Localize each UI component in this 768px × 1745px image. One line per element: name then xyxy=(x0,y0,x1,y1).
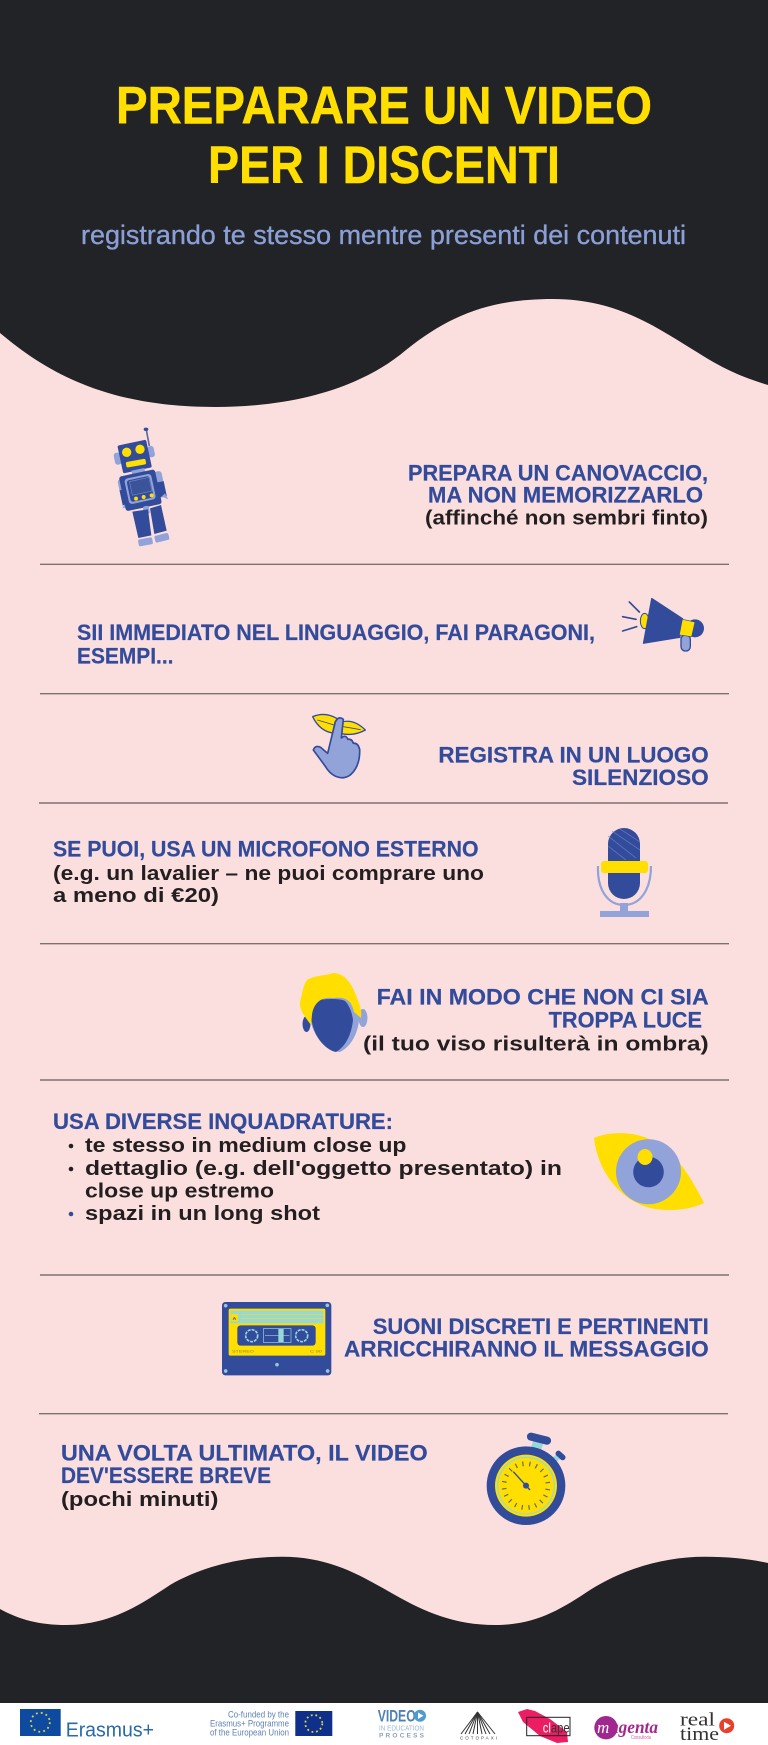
logo: Magenta: Consultoria xyxy=(631,1735,651,1741)
logo: Realtime: time xyxy=(680,1724,719,1745)
panel: logo strip xyxy=(0,1703,768,1745)
text: prepare a script: PREPARA UN CANOVACCIO, xyxy=(408,461,708,486)
text: avoid too much backlight: (il tuo viso risulterà in ombra) xyxy=(363,1033,709,1056)
icon: stopwatch xyxy=(487,1432,567,1525)
logo: Magenta xyxy=(594,1716,658,1741)
icon: eye xyxy=(594,1133,704,1210)
icon: head in shadow xyxy=(300,973,368,1052)
text: avoid too much backlight: FAI IN MODO CHE NON CI SIA xyxy=(377,985,709,1010)
title: PER I DISCENTI xyxy=(208,136,560,195)
title xyxy=(116,76,652,195)
text: record in a quiet place: SILENZIOSO xyxy=(572,765,709,790)
icon: cassette tape: A xyxy=(233,1316,237,1322)
panel: dark header with wave xyxy=(0,0,768,407)
icon: robot xyxy=(113,428,170,546)
text: use different shots: dettaglio (e.g. dell'oggetto presentato) in xyxy=(85,1157,562,1180)
logo: Cotopaxi: COTOPAXI xyxy=(460,1736,497,1740)
panel: dark footer wave xyxy=(0,1557,768,1704)
subtitle: registrando te stesso mentre presenti dei contenuti xyxy=(81,220,686,250)
logo: co-funded by the EU: of the European Union xyxy=(210,1728,289,1738)
text: use different shots: close up estremo xyxy=(85,1179,274,1202)
text: keep the video short: (pochi minuti) xyxy=(61,1488,218,1511)
text: use different shots xyxy=(53,1109,562,1225)
logo: Video in Education Process: VIDEO xyxy=(378,1707,416,1726)
text: prepare a script xyxy=(408,461,708,529)
text: avoid too much backlight xyxy=(363,985,709,1056)
text: use different shots: USA DIVERSE INQUADRATURE: xyxy=(53,1109,393,1134)
text: record in a quiet place: REGISTRA IN UN LUOGO xyxy=(438,742,709,767)
logo: co-funded by the EU: Co-funded by the xyxy=(228,1709,289,1719)
logo: Magenta: m xyxy=(597,1718,609,1737)
text: prepare a script: MA NON MEMORIZZARLO xyxy=(428,483,703,508)
text: keep the video short: DEV'ESSERE BREVE xyxy=(61,1463,271,1488)
text: immediate language: ESEMPI... xyxy=(77,643,174,668)
icon: hush finger over lips xyxy=(313,714,365,778)
text: external microphone: (e.g. un lavalier – ne puoi comprare uno xyxy=(53,862,484,885)
text: external microphone: SE PUOI, USA UN MICROFONO ESTERNO xyxy=(53,837,478,862)
logo: Clape: clape xyxy=(543,1720,570,1736)
logo: Realtime: real xyxy=(680,1710,715,1731)
text: external microphone: a meno di €20) xyxy=(53,884,219,907)
logo: Video in Education Process: PROCESS xyxy=(379,1733,425,1740)
icon: cassette tape xyxy=(222,1302,331,1375)
text: keep the video short xyxy=(61,1441,428,1511)
text: use different shots: spazi in un long shot xyxy=(85,1202,320,1225)
logo: co-funded by the EU: Erasmus+ Programme xyxy=(210,1718,289,1728)
logo: Video in Education Process: IN EDUCATION xyxy=(379,1726,424,1733)
icon: microphone xyxy=(598,828,651,917)
text: immediate language xyxy=(77,620,595,668)
text: external microphone xyxy=(53,837,484,907)
text: record in a quiet place xyxy=(438,742,709,790)
title: PREPARARE UN VIDEO xyxy=(116,76,652,135)
logo: Magenta: agenta xyxy=(610,1717,658,1737)
logo: Realtime xyxy=(680,1710,734,1745)
text: prepare a script: (affinché non sembri finto) xyxy=(425,506,708,529)
logo: Erasmus+ xyxy=(20,1709,154,1742)
text: discreet sounds: SUONI DISCRETI E PERTINENTI xyxy=(373,1314,709,1339)
logo: Clape xyxy=(518,1709,570,1743)
text: discreet sounds: ARRICCHIRANNO IL MESSAGGIO xyxy=(344,1337,709,1362)
text: use different shots: te stesso in medium close up xyxy=(85,1134,406,1157)
text: avoid too much backlight: TROPPA LUCE xyxy=(549,1008,702,1033)
text: keep the video short: UNA VOLTA ULTIMATO, IL VIDEO xyxy=(61,1441,428,1466)
logo: co-funded by the EU xyxy=(210,1709,332,1738)
logo: Video in Education Process xyxy=(378,1707,426,1740)
icon: cassette tape: STEREO xyxy=(232,1349,254,1354)
logo: Erasmus+: Erasmus+ xyxy=(66,1720,154,1742)
text: immediate language: SII IMMEDIATO NEL LINGUAGGIO, FAI PARAGONI, xyxy=(77,620,595,645)
icon: cassette tape: C 90 xyxy=(310,1349,323,1354)
icon: megaphone xyxy=(623,598,704,651)
text: discreet sounds xyxy=(344,1314,709,1362)
logo: Cotopaxi xyxy=(460,1712,497,1740)
